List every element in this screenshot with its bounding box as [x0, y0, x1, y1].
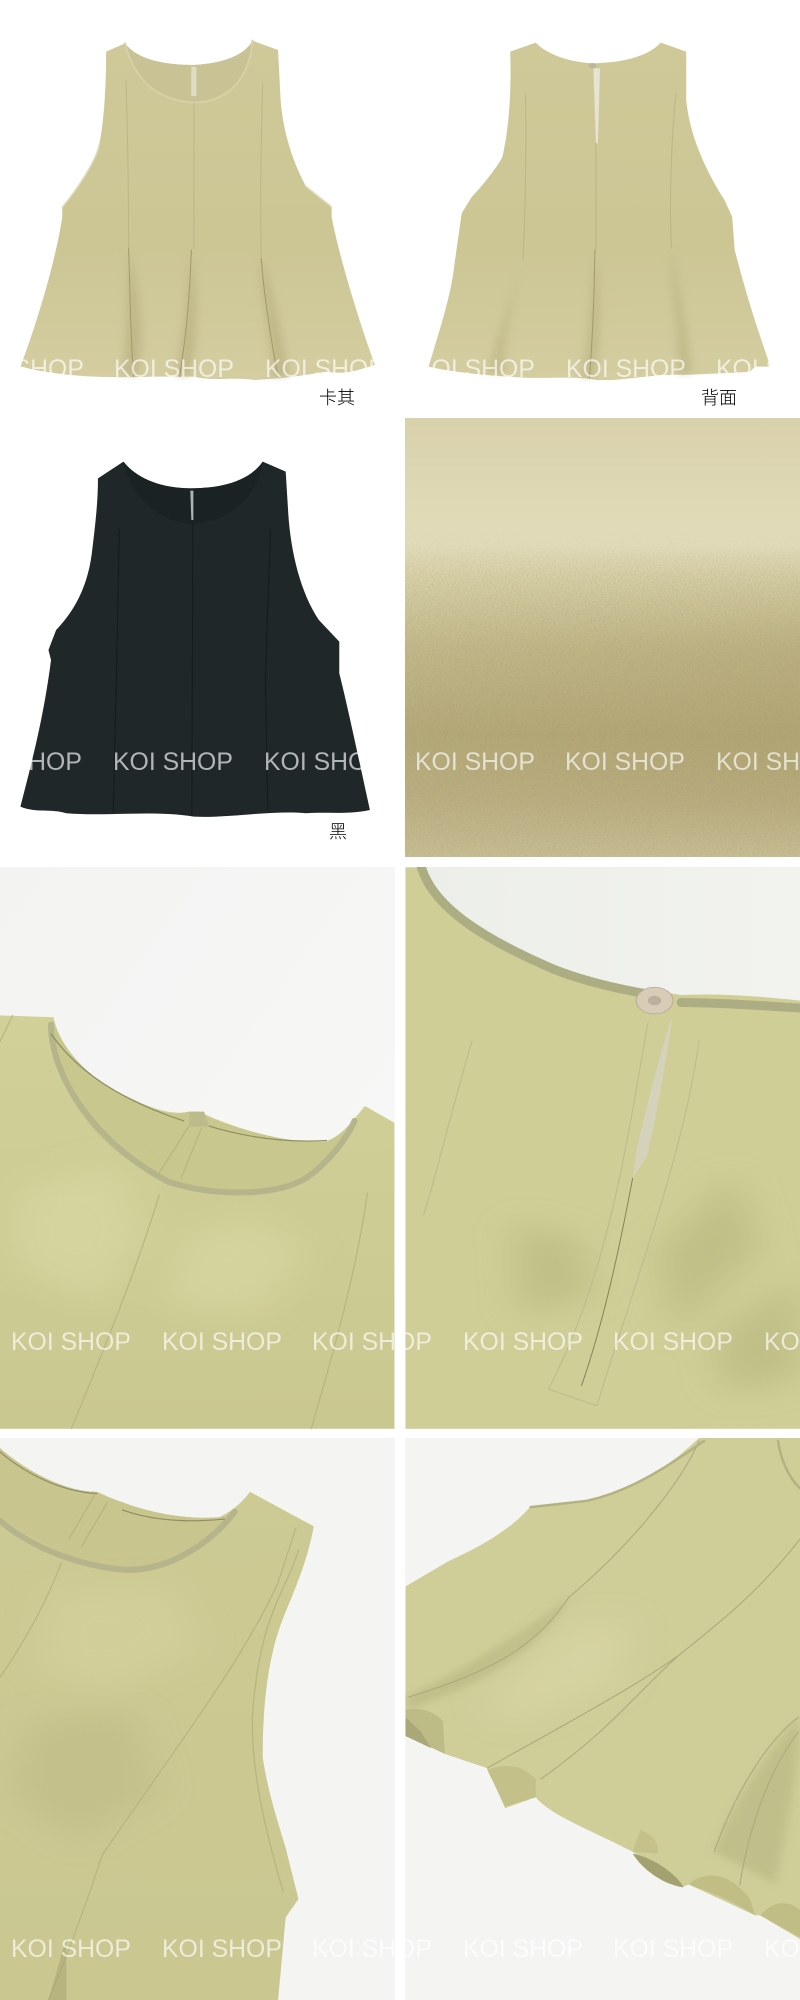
watermark row: neckline details: KOI SHOP [312, 1329, 432, 1356]
watermark row: black garment and fabric [0, 749, 800, 776]
watermark row: top garments: KOI SHOP [566, 356, 686, 383]
garment: black front [20, 462, 370, 817]
watermark row: neckline details: KOI SHOP [11, 1329, 131, 1356]
photo background [405, 867, 800, 1429]
watermark row: top garments [0, 356, 800, 383]
garment: placket closeup [406, 867, 800, 1429]
photo background [405, 1438, 800, 2000]
fabric weave texture [405, 546, 800, 857]
garment: shoulder closeup [0, 1448, 314, 2000]
watermark row: top garments: KOI SHOP [114, 356, 234, 383]
watermark row: black garment and fabric: KOI SHOP [565, 749, 685, 776]
watermark row: neckline details: KOI SHOP [613, 1329, 733, 1356]
panel: button placket detail [405, 867, 800, 1429]
panel: pleated hem detail [405, 1438, 800, 2000]
watermark row: lower details: KOI SHOP [463, 1936, 583, 1963]
label: khaki: 卡其 [319, 388, 355, 408]
fabric tonal shading [692, 602, 800, 690]
watermark row: neckline details [11, 1329, 800, 1356]
watermark row: neckline details: KOI SHOP [162, 1329, 282, 1356]
garment: khaki front [20, 41, 375, 380]
panel: fabric swatch [405, 418, 800, 857]
watermark row: lower details: KOI SHOP [11, 1936, 131, 1963]
watermark row: top garments: KOI SHOP [265, 356, 385, 383]
watermark row: black garment and fabric: KOI SHOP [415, 749, 535, 776]
label: back: 背面 [701, 388, 737, 408]
watermark row: top garments: KOI SHOP [415, 356, 535, 383]
watermark row: black garment and fabric: KOI SHOP [264, 749, 384, 776]
label: black: 黑 [329, 822, 347, 842]
panel: khaki front view [20, 41, 375, 380]
watermark row: lower details [11, 1936, 800, 1963]
photo background [0, 1438, 395, 2000]
watermark row: lower details: KOI SHOP [312, 1936, 432, 1963]
fabric background [405, 418, 800, 857]
photo background [0, 867, 395, 1356]
panel: armhole detail [0, 1438, 395, 2000]
panel: khaki back view [429, 43, 770, 380]
panel: black front view [20, 462, 370, 817]
garment: neckline closeup [0, 1015, 394, 1429]
watermark row: lower details: KOI SHOP [613, 1936, 733, 1963]
panel: neckline detail [0, 867, 395, 1429]
garment: khaki back [429, 43, 770, 380]
watermark row: lower details: KOI SHOP [162, 1936, 282, 1963]
garment: hem ruffles [406, 1438, 800, 1939]
watermark row: neckline details: KOI SHOP [463, 1329, 583, 1356]
watermark row: black garment and fabric: KOI SHOP [113, 749, 233, 776]
